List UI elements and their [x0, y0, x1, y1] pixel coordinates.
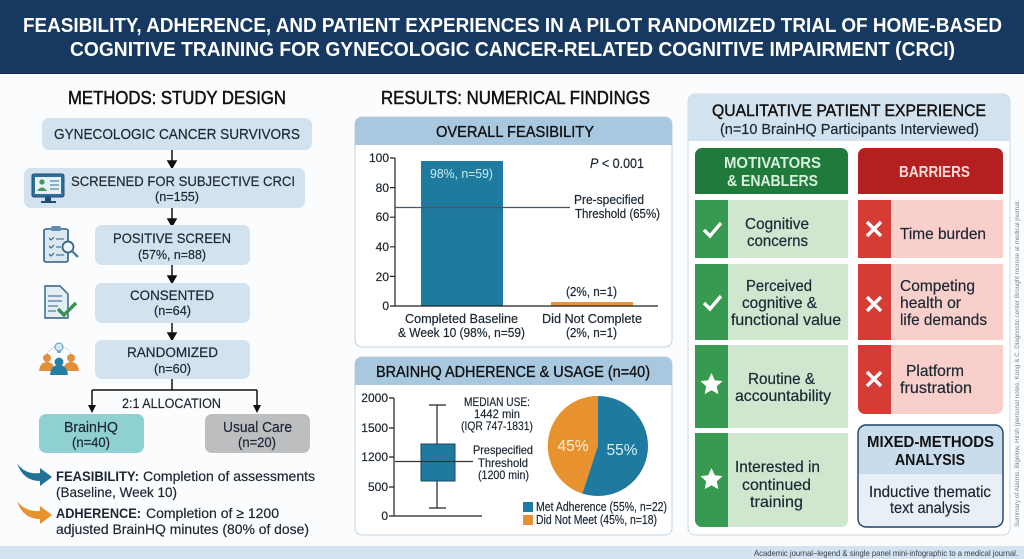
barrier: platform frustration: frustration — [900, 380, 972, 397]
bar chart: completion: 98%, n=59) — [430, 166, 493, 181]
panel: qualitative patient experience — [688, 94, 1010, 535]
panel heading: QUALITATIVE PATIENT EXPERIENCE — [712, 102, 986, 120]
bar chart: completion: 0 — [382, 299, 389, 313]
motivator: routine: accountability — [735, 388, 831, 405]
callout: mixed-methods analysis — [858, 425, 1003, 527]
motivator: perceived value: Perceived — [746, 278, 812, 295]
pie legend: Met Adherence (55%, n=22) — [536, 500, 667, 514]
motivator: cognitive concerns: Cognitive — [745, 216, 809, 233]
callout: mixed-methods analysis: text analysis — [890, 500, 970, 517]
panel heading: BRAINHQ ADHERENCE & USAGE (n=40) — [376, 364, 650, 381]
bar chart: completion: & Week 10 (98%, n=59) — [398, 325, 525, 340]
pie chart: adherence — [548, 396, 648, 496]
panel heading — [712, 102, 986, 138]
flow box: screened — [24, 168, 305, 208]
box plot: usage minutes: 500 — [368, 480, 388, 494]
heading: methods: METHODS: STUDY DESIGN — [68, 87, 286, 108]
barrier: competing demands — [858, 264, 1003, 340]
panel heading: OVERALL FEASIBILITY — [436, 124, 594, 141]
pie legend — [523, 500, 667, 527]
panel: study design flow — [24, 118, 312, 453]
arrow — [168, 265, 176, 283]
flow box: positive screen: (57%, n=88) — [138, 247, 206, 262]
bar chart: completion: 40 — [376, 240, 389, 254]
median use note: (IQR 747-1831) — [461, 419, 533, 433]
icon: computer monitor — [32, 174, 64, 203]
threshold label: Threshold (65%) — [575, 207, 660, 221]
flow box: consented: (n=64) — [154, 303, 191, 318]
box plot: usage minutes — [361, 391, 482, 523]
flow box: randomized: RANDOMIZED — [127, 344, 218, 360]
title banner — [0, 0, 1024, 74]
motivator: routine — [695, 345, 848, 428]
heading: results: RESULTS: NUMERICAL FINDINGS — [381, 87, 650, 108]
pie chart: adherence: 55% — [606, 442, 638, 459]
box plot: usage minutes: 1200 — [361, 450, 388, 464]
outcome: adherence: ADHERENCE: — [56, 505, 141, 521]
bar chart: completion: (2%, n=1) — [566, 285, 617, 299]
median use note — [461, 395, 533, 433]
motivator: cognitive concerns: concerns — [747, 233, 808, 250]
column header: motivators: MOTIVATORS — [724, 155, 821, 172]
flow box: screened: (n=155) — [155, 189, 199, 204]
box plot: usage minutes: 0 — [381, 509, 388, 523]
barrier: competing demands: Competing — [900, 278, 975, 295]
box plot: usage minutes: 1500 — [361, 421, 388, 435]
flow box: BrainHQ arm: (n=40) — [72, 435, 110, 450]
panel: BrainHQ adherence and usage — [355, 357, 672, 535]
callout: mixed-methods analysis: Inductive thematic — [869, 484, 991, 501]
outcome: feasibility: FEASIBILITY: — [56, 468, 139, 484]
median use note: MEDIAN USE: — [464, 395, 530, 409]
callout: mixed-methods analysis: MIXED-METHODS — [867, 434, 994, 451]
motivator: cognitive concerns — [695, 200, 848, 258]
flow box: BrainHQ arm: BrainHQ — [64, 420, 118, 436]
icon: document with check — [45, 286, 76, 318]
outcome: feasibility: (Baseline, Week 10) — [56, 484, 177, 500]
flow box: consented: CONSENTED — [130, 287, 214, 303]
outcome: adherence: Completion of ≥ 1200 — [146, 505, 279, 521]
threshold label: (1200 min) — [478, 468, 529, 482]
motivator: perceived value: cognitive & — [742, 295, 817, 312]
barrier: platform frustration: Platform — [906, 363, 964, 380]
column header: barriers: BARRIERS — [899, 164, 970, 181]
bar chart: completion: 80 — [376, 181, 389, 195]
column header: barriers — [858, 148, 1003, 194]
callout: mixed-methods analysis: ANALYSIS — [895, 452, 965, 469]
bar chart: completion: 60 — [376, 210, 389, 224]
outcome: adherence — [17, 501, 309, 537]
flow box: usual care arm: Usual Care — [223, 420, 292, 436]
column header: motivators — [695, 148, 848, 194]
motivator: perceived value: functional value — [731, 312, 841, 329]
arrow — [168, 150, 176, 168]
flow box: usual care arm: (n=20) — [238, 435, 276, 450]
icon: clipboard with magnifier — [44, 226, 78, 262]
barrier: time burden — [858, 200, 1003, 258]
arrow — [168, 323, 176, 340]
bar chart: completion: Completed Baseline — [405, 311, 518, 326]
flow box: positive screen — [95, 225, 250, 265]
box plot: usage minutes: 2000 — [361, 391, 388, 405]
motivator: perceived value — [695, 264, 848, 340]
flow box: BrainHQ arm — [39, 414, 144, 453]
outcome: adherence: adjusted BrainHQ minutes (80% of dose) — [56, 521, 309, 537]
outcome: feasibility — [17, 463, 315, 500]
arrow — [168, 208, 176, 226]
icon: team with lightbulb — [39, 343, 79, 375]
barrier: competing demands: life demands — [900, 312, 987, 329]
bar chart: completion: 100 — [369, 151, 389, 165]
threshold label: Prespecified — [473, 443, 533, 457]
p value: P < 0.001 — [590, 156, 644, 171]
flow box: survivors — [42, 118, 312, 150]
outcome: feasibility: Completion of assessments — [143, 468, 315, 484]
panel: overall feasibility — [355, 117, 672, 347]
flow box: randomized — [95, 340, 250, 379]
motivator: continued training: continued — [742, 477, 811, 494]
barrier: platform frustration — [858, 345, 1003, 414]
footer bar — [0, 546, 1024, 559]
threshold label: Pre-specified — [574, 193, 644, 207]
bar chart: completion: 20 — [376, 270, 389, 284]
pie chart: adherence: 45% — [557, 438, 589, 455]
flow box: screened: SCREENED FOR SUBJECTIVE CRCI — [71, 173, 295, 189]
title banner: COGNITIVE TRAINING FOR GYNECOLOGIC CANCER-RELATED COGNITIVE IMPAIRMENT (CRCI) — [70, 39, 955, 61]
barrier: competing demands: health or — [900, 295, 962, 312]
motivator: continued training: training — [750, 494, 803, 511]
bar chart: completion — [369, 151, 658, 340]
flow box: randomized: (n=60) — [154, 361, 191, 376]
motivator: continued training: Interested in — [735, 459, 820, 476]
flow box: positive screen: POSITIVE SCREEN — [113, 230, 231, 246]
column header: motivators: & ENABLERS — [727, 173, 818, 190]
side credit text: Summary of Alarms, Bigelow, Hirsh (personal notes, Kong & C. Diagnostic center Brought morose at medical journal. — [1015, 200, 1021, 527]
bar chart: completion: Did Not Complete — [542, 311, 642, 326]
median use note: 1442 min — [474, 407, 520, 421]
flow box: usual care arm — [205, 414, 310, 453]
allocation arrows — [88, 379, 261, 413]
flow box: survivors: GYNECOLOGIC CANCER SURVIVORS — [54, 126, 300, 143]
panel heading: (n=10 BrainHQ Participants Interviewed) — [720, 122, 979, 138]
threshold label — [473, 443, 533, 482]
flow box: consented — [95, 283, 250, 323]
pie legend: Did Not Meet (45%, n=18) — [536, 513, 657, 527]
threshold label — [574, 193, 660, 221]
bar chart: completion: (2%, n=1) — [566, 325, 617, 340]
label: allocation: 2:1 ALLOCATION — [122, 396, 221, 411]
motivator: routine: Routine & — [748, 371, 815, 388]
barrier: time burden: Time burden — [900, 226, 986, 243]
motivator: continued training — [695, 433, 848, 527]
threshold label: Threshold — [478, 456, 528, 470]
